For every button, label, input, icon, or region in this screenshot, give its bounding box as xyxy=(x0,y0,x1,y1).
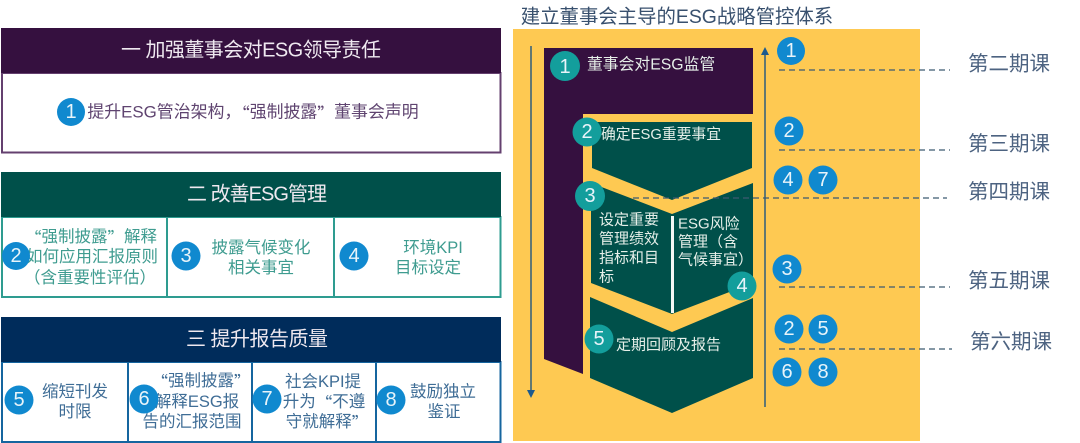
lesson labels xyxy=(968,52,1052,354)
lesson badges: 5 xyxy=(817,318,829,340)
text: cell 6: 解释ESG报 xyxy=(155,392,239,411)
badge 7 xyxy=(252,384,282,414)
text: board statement: 提升ESG管治架构，“强制披露”董事会声明 xyxy=(87,100,419,124)
heading: panel three xyxy=(1,317,501,362)
text: review and report: 定期回顾及报告 xyxy=(616,336,721,354)
heading: panel two: 二 改善ESG管理 xyxy=(187,182,327,206)
badge 5 xyxy=(4,386,34,414)
text: KPI targets: 标 xyxy=(599,268,614,286)
badge 1: 1 xyxy=(65,101,77,123)
lesson badges: 6 xyxy=(781,361,793,383)
lesson labels: 第五期课 xyxy=(968,270,1050,292)
lesson badges: 8 xyxy=(817,361,829,383)
lesson badges: 2 xyxy=(783,318,795,340)
lesson badges xyxy=(772,37,838,386)
text: cell 8: 鼓励独立 xyxy=(410,382,476,401)
text: cell 4: 目标设定 xyxy=(395,258,461,277)
text: board oversight: 董事会对ESG监管 xyxy=(587,56,715,74)
badge 8: 8 xyxy=(385,389,397,411)
text: cell 3: 披露气候变化 xyxy=(212,238,310,257)
panel: improve ESG management xyxy=(1,172,501,297)
text: ESG risk: 管理（含 xyxy=(678,234,738,250)
text: materiality: 确定ESG重要事宜 xyxy=(601,126,721,143)
badge teal 5: 5 xyxy=(593,328,605,350)
diagram: yellow band xyxy=(584,114,752,122)
text: cell 8: 鉴证 xyxy=(428,402,460,421)
diagram: white divider xyxy=(671,216,674,313)
text: cell 6: “强制披露” xyxy=(152,369,250,393)
title: control system: 建立董事会主导的ESG战略管控体系 xyxy=(521,6,833,28)
heading: panel two xyxy=(1,172,501,217)
badge 4: 4 xyxy=(348,245,360,267)
lesson labels: 第二期课 xyxy=(968,52,1050,76)
lesson labels: 第四期课 xyxy=(968,180,1050,204)
lesson badges: 2 xyxy=(783,120,795,142)
text: cell 2 xyxy=(24,225,158,287)
panel: yellow background xyxy=(513,29,920,441)
text: cell 5: 缩短刊发 xyxy=(42,382,108,401)
diagram: green chevron targets and risk xyxy=(591,183,753,314)
badge teal 1: 1 xyxy=(559,56,571,78)
text: cell 7: 升为“不遵 xyxy=(283,390,366,414)
arrow: upward xyxy=(761,47,769,407)
panel: improve reporting quality xyxy=(1,317,501,442)
heading: panel three: 三 提升报告质量 xyxy=(186,328,328,350)
lesson badges: 7 xyxy=(817,169,829,191)
lesson labels: 第六期课 xyxy=(970,330,1052,354)
text: ESG risk: 气候事宜） xyxy=(678,252,753,268)
badge teal 2: 2 xyxy=(581,121,593,143)
badge 1 xyxy=(57,98,85,126)
text: KPI targets: 指标和目 xyxy=(599,250,659,266)
badge 5: 5 xyxy=(13,389,25,411)
diagram: green chevron review xyxy=(590,297,753,413)
heading: panel one xyxy=(1,28,501,73)
text: ESG risk xyxy=(678,216,753,268)
text: cell 8 xyxy=(410,382,476,421)
text: cell 5 xyxy=(42,382,108,421)
badge 6 xyxy=(130,384,158,414)
text: cell 5: 时限 xyxy=(58,402,92,421)
text: ESG risk: ESG风险 xyxy=(678,216,740,232)
dashed lesson guide lines xyxy=(633,70,952,349)
badge teal 3 xyxy=(575,181,605,211)
diagram: board oversight purple shape xyxy=(544,48,753,374)
badge 3: 3 xyxy=(180,245,192,267)
text: cell 7: 守就解释” xyxy=(286,410,368,434)
text: KPI targets: 设定重要 xyxy=(599,212,659,228)
badge teal 1 xyxy=(550,51,580,81)
lesson badges: 4 xyxy=(782,169,794,191)
text: cell 6 xyxy=(142,369,250,431)
text: cell 6: 告的汇报范围 xyxy=(142,412,242,431)
text: cell 3: 相关事宜 xyxy=(228,258,294,277)
lesson labels: 第三期课 xyxy=(968,132,1050,156)
text: cell 4 xyxy=(395,238,463,277)
badge 4 xyxy=(340,242,368,270)
badge 7: 7 xyxy=(261,388,273,410)
badge teal 5 xyxy=(584,324,614,354)
badge teal 4 xyxy=(728,272,756,300)
text: cell 7 xyxy=(283,372,368,434)
text: cell 4: 环境KPI xyxy=(403,238,463,257)
badge teal 4: 4 xyxy=(736,275,748,297)
heading: panel one: 一 加强董事会对ESG领导责任 xyxy=(121,38,381,62)
arrow: downward xyxy=(527,46,535,398)
lesson badges: 3 xyxy=(781,258,793,280)
text: KPI targets xyxy=(599,212,659,286)
badge 6: 6 xyxy=(138,388,150,410)
text: cell 2: 如何应用汇报原则 xyxy=(26,247,158,266)
diagram: green chevron materiality xyxy=(592,122,752,200)
badge 3 xyxy=(172,242,200,270)
text: cell 3 xyxy=(212,238,310,277)
text: cell 2: “强制披露”解释 xyxy=(25,225,158,249)
lesson badges: 1 xyxy=(785,40,797,62)
text: KPI targets: 管理绩效 xyxy=(599,230,659,248)
panel: strengthen board leadership xyxy=(1,28,501,152)
badge 8 xyxy=(376,386,406,414)
badge 2: 2 xyxy=(10,245,22,267)
text: cell 7: 社会KPI提 xyxy=(285,372,362,391)
badge teal 3: 3 xyxy=(584,185,596,207)
text: cell 2: （含重要性评估） xyxy=(24,268,156,287)
badge 2 xyxy=(2,242,30,270)
badge teal 2 xyxy=(572,118,602,146)
